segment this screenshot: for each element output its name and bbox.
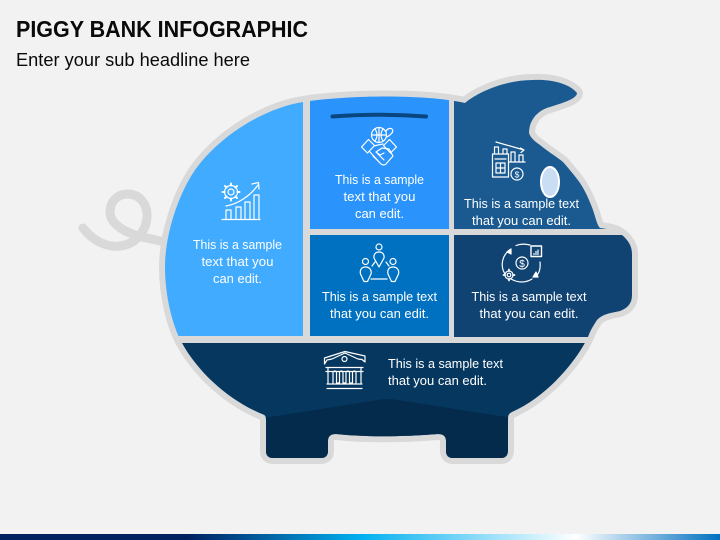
panel: snout — [454, 235, 644, 337]
panel: legs shadow — [266, 399, 508, 458]
panel: top right head — [454, 80, 606, 229]
text: top middle panel: text that you — [344, 190, 416, 204]
bottom gradient band — [0, 534, 720, 540]
coloured body panels — [150, 70, 644, 465]
panel: bottom belly — [182, 343, 585, 458]
panel: left body — [165, 102, 303, 336]
text: top middle panel: This is a sample — [335, 173, 424, 187]
text: left panel: text that you — [202, 255, 274, 269]
text: top middle panel: can edit. — [355, 207, 404, 221]
pig body outline — [165, 80, 632, 458]
text: top right panel: This is a sample text — [464, 197, 580, 211]
text: snout panel: that you can edit. — [480, 307, 578, 321]
panel: lower middle — [310, 235, 449, 336]
text: snout panel — [472, 290, 587, 321]
icon: team of people — [360, 244, 399, 282]
text: bottom belly panel: that you can edit. — [388, 374, 487, 388]
text: top middle panel — [335, 173, 424, 221]
text: snout panel: This is a sample text — [472, 290, 587, 304]
text: bottom belly panel: This is a sample text — [388, 357, 504, 371]
pig tail — [83, 194, 165, 246]
text: bottom belly panel — [388, 357, 504, 388]
pig eye — [541, 167, 559, 197]
text: lower middle panel — [322, 290, 438, 321]
icon: calculator and falling bars — [492, 142, 525, 180]
icon: gear and growth chart — [222, 182, 260, 220]
subtitle: Enter your sub headline here — [16, 50, 250, 70]
icon: money cycle — [502, 244, 542, 282]
icon: calculator and falling bars: $ — [515, 170, 520, 180]
text: lower middle panel: This is a sample text — [322, 290, 438, 304]
icon: money cycle: $ — [519, 259, 525, 270]
text: left panel: This is a sample — [193, 238, 282, 252]
text: top right panel — [464, 197, 580, 228]
text: left panel: can edit. — [213, 272, 262, 286]
icon: globe and handshake — [362, 128, 396, 165]
panel: top middle — [310, 85, 449, 229]
icon: bank building — [324, 352, 365, 388]
coin slot — [332, 115, 426, 116]
title: PIGGY BANK INFOGRAPHIC — [16, 16, 308, 42]
text: top right panel: that you can edit. — [472, 214, 571, 228]
text: lower middle panel: that you can edit. — [330, 307, 429, 321]
text: left panel — [193, 238, 282, 286]
